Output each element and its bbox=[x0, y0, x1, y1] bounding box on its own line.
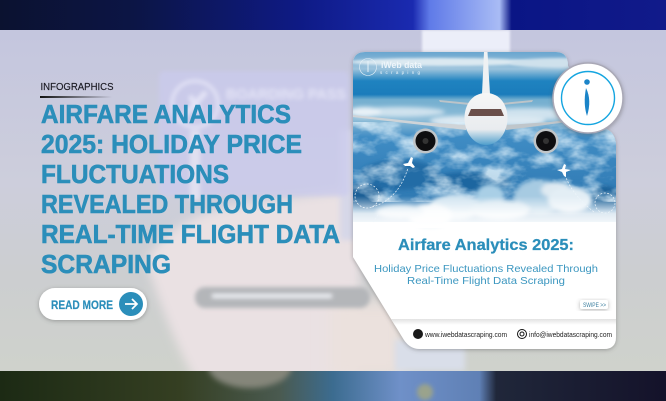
cockpit windows bbox=[468, 109, 504, 116]
top background band bbox=[0, 0, 666, 31]
swipe tag: SWIPE >> bbox=[583, 303, 606, 309]
bottom background band bbox=[0, 371, 666, 401]
round logo badge bbox=[553, 63, 623, 133]
blurred phone in the hand bbox=[195, 287, 370, 308]
main heading: FLUCTUATIONS bbox=[41, 161, 229, 189]
website: www.iwebdatascraping.com bbox=[424, 330, 507, 339]
card subtitle bbox=[374, 263, 598, 287]
airplane bbox=[353, 52, 604, 154]
blurred boarding pass in the background bbox=[159, 71, 349, 200]
main heading: SCRAPING bbox=[41, 251, 171, 279]
tail fin bbox=[482, 52, 490, 94]
social post card bbox=[345, 52, 619, 349]
read more button bbox=[39, 288, 147, 320]
wings bbox=[353, 115, 466, 130]
icon: small plane left bbox=[403, 157, 415, 168]
card footer bbox=[385, 319, 616, 339]
main heading bbox=[41, 101, 340, 279]
icon: small plane right bbox=[557, 164, 571, 177]
engines bbox=[413, 128, 558, 154]
main heading: 2025: HOLIDAY PRICE bbox=[41, 131, 302, 159]
card photo: sky and clouds bbox=[345, 52, 619, 228]
main heading: REVEALED THROUGH bbox=[41, 191, 293, 219]
icon: globe bbox=[413, 329, 423, 339]
cloud texture bbox=[353, 122, 616, 202]
read more button: READ MORE bbox=[51, 298, 113, 312]
brand logo: scraping bbox=[380, 70, 420, 75]
brand logo: iWeb data bbox=[381, 60, 423, 70]
fuselage bbox=[464, 93, 508, 145]
card subtitle: Real-Time Flight Data Scraping bbox=[407, 275, 565, 287]
main heading: AIRFARE ANALYTICS bbox=[41, 101, 291, 129]
swipe tag bbox=[580, 300, 608, 309]
email: info@iwebdatascraping.com bbox=[529, 330, 612, 339]
small planes and dashed routes bbox=[355, 168, 615, 222]
card title: Airfare Analytics 2025: bbox=[398, 237, 574, 254]
card subtitle: Holiday Price Fluctuations Revealed Through bbox=[374, 263, 598, 275]
icon: arrow in circle bbox=[119, 292, 143, 316]
eyebrow label: INFOGRAPHICS bbox=[40, 81, 114, 93]
main heading: REAL-TIME FLIGHT DATA bbox=[41, 221, 340, 249]
icon: at sign bbox=[518, 330, 526, 338]
blurred boarding pass in the background: BOARDING PASS bbox=[226, 86, 346, 103]
eyebrow label bbox=[40, 81, 114, 98]
brand logo bbox=[360, 58, 423, 76]
